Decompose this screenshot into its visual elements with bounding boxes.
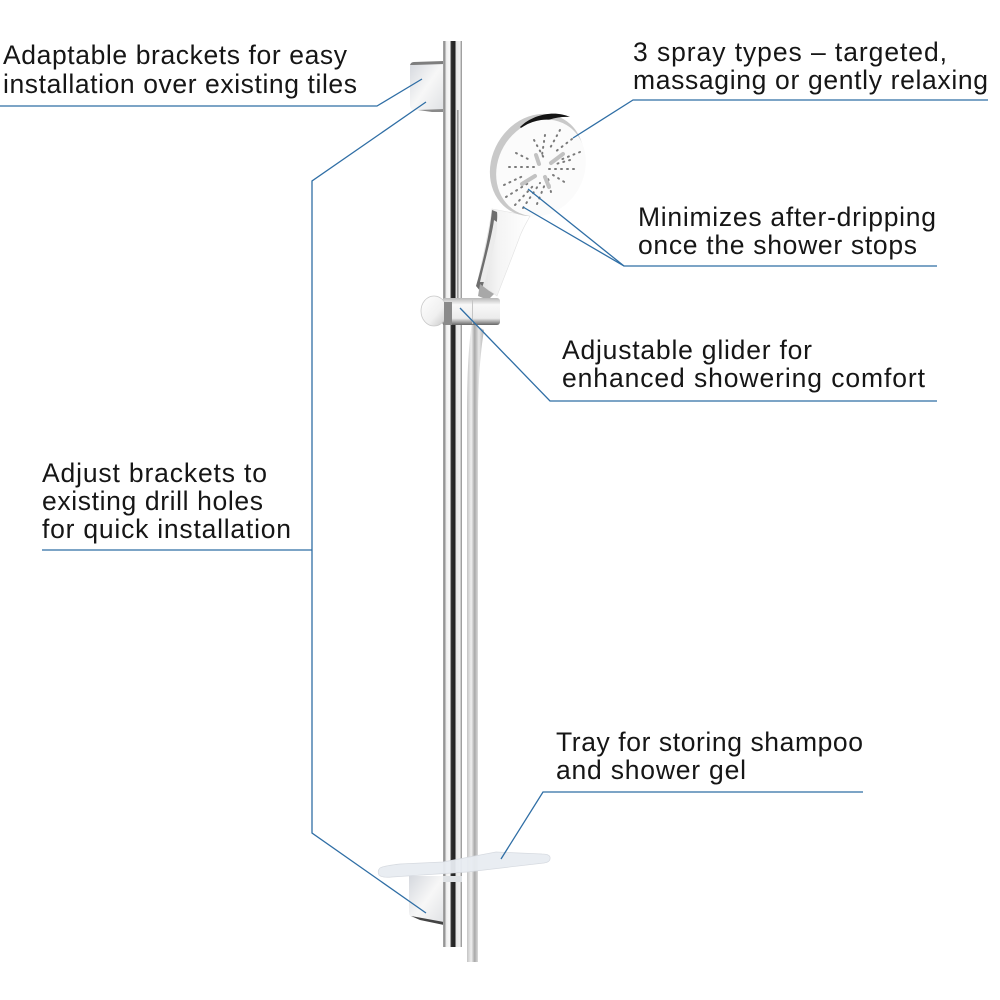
glider bbox=[421, 284, 500, 326]
soap tray bbox=[378, 852, 550, 882]
callout: drill holes bbox=[42, 102, 426, 913]
hand shower bbox=[472, 97, 603, 296]
hose bbox=[467, 322, 484, 962]
shower handle bbox=[477, 209, 530, 296]
callout: drill holes: for quick installation bbox=[42, 514, 291, 544]
callout: adaptable brackets: Adaptable brackets for easy bbox=[3, 40, 348, 70]
callout: glider: enhanced showering comfort bbox=[562, 363, 926, 393]
callout: spray types bbox=[573, 37, 988, 138]
nozzles bbox=[504, 130, 580, 208]
callout: glider: Adjustable glider for bbox=[562, 335, 812, 365]
callout: after-dripping: Minimizes after-dripping bbox=[638, 202, 936, 232]
callout: tray: Tray for storing shampoo bbox=[556, 727, 863, 757]
callout: spray types: massaging or gently relaxing bbox=[633, 65, 988, 95]
lower wall bracket bbox=[409, 876, 444, 925]
upper wall bracket bbox=[410, 61, 444, 112]
callout: adaptable brackets: installation over existing tiles bbox=[3, 69, 357, 99]
shower rail bbox=[443, 41, 462, 947]
callout: drill holes: existing drill holes bbox=[42, 486, 263, 516]
callout: glider bbox=[460, 308, 937, 401]
callout: adaptable brackets bbox=[0, 40, 422, 106]
callout: spray types: 3 spray types – targeted, bbox=[633, 37, 947, 67]
callout: tray bbox=[501, 727, 863, 859]
shower head face bbox=[479, 103, 603, 233]
callout: after-dripping: once the shower stops bbox=[638, 230, 917, 260]
spray selector bars bbox=[522, 154, 563, 187]
callout: tray: and shower gel bbox=[556, 755, 746, 785]
shower head rim bbox=[472, 97, 602, 233]
callout: after-dripping bbox=[523, 189, 937, 266]
callout: drill holes: Adjust brackets to bbox=[42, 458, 267, 488]
